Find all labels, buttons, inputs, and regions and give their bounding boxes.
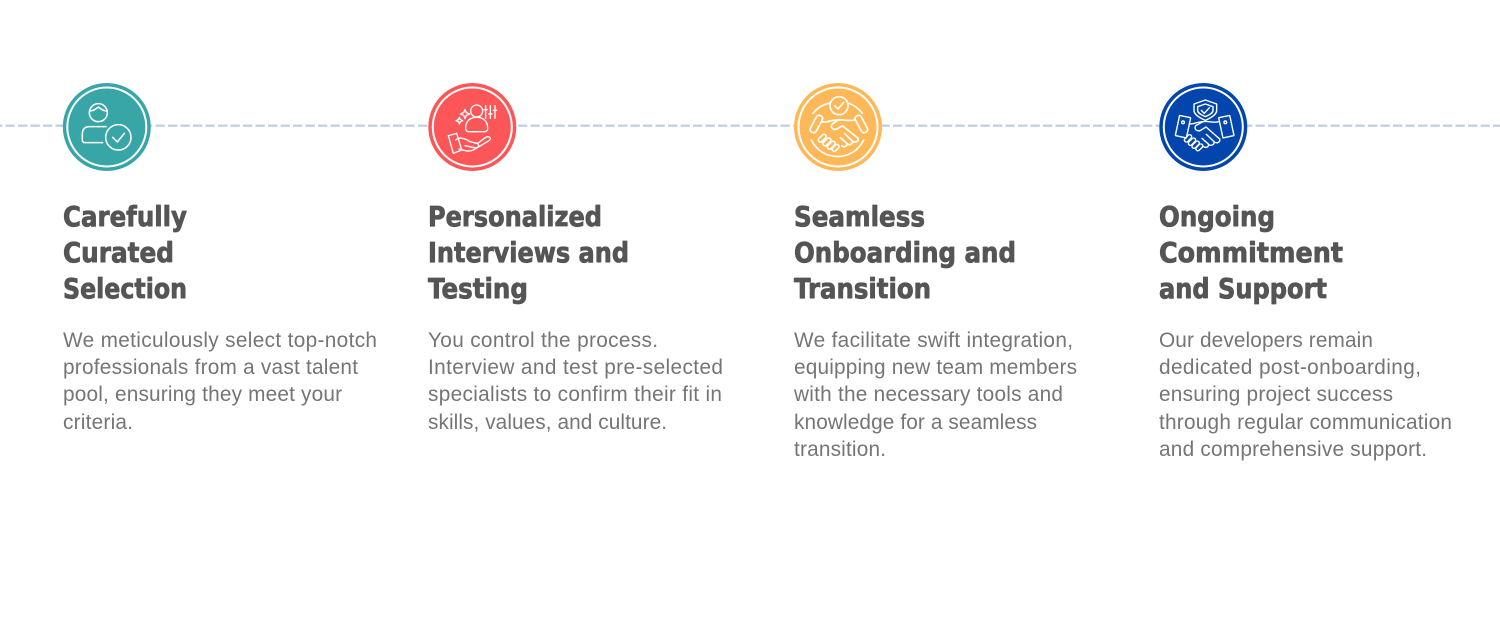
panel: Personalized Interviews and Testing: [428, 83, 723, 434]
icon: person with check mark: [63, 83, 151, 171]
description: and comprehensive support.: [1159, 438, 1427, 461]
description: knowledge for a seamless: [794, 411, 1037, 434]
heading: [1159, 201, 1343, 305]
description: We facilitate swift integration,: [794, 329, 1073, 352]
heading: Ongoing: [1159, 201, 1275, 233]
description: transition.: [794, 438, 886, 461]
description: ensuring project success: [1159, 383, 1393, 406]
description: through regular communication: [1159, 411, 1452, 434]
panel: Carefully Curated Selection: [63, 83, 377, 434]
heading: Carefully: [63, 201, 187, 233]
heading: Onboarding and: [794, 237, 1016, 269]
heading: Transition: [794, 273, 931, 305]
icon: hand holding person with sliders: [428, 83, 516, 171]
heading: Interviews and: [428, 237, 629, 269]
description: specialists to confirm their fit in: [428, 383, 722, 406]
description: dedicated post-onboarding,: [1159, 356, 1421, 379]
icon: handshake with shield: [1159, 83, 1247, 171]
panel: Seamless Onboarding and Transition: [793, 83, 1077, 461]
description: Interview and test pre-selected: [428, 356, 723, 379]
description: We meticulously select top-notch: [63, 329, 377, 352]
heading: and Support: [1159, 273, 1327, 305]
description: You control the process.: [428, 329, 658, 352]
heading: Curated: [63, 237, 174, 269]
panel: Ongoing Commitment and Support: [1159, 83, 1452, 461]
description: skills, values, and culture.: [428, 411, 667, 434]
heading: Seamless: [794, 201, 925, 233]
heading: Personalized: [428, 201, 602, 233]
description: criteria.: [63, 411, 133, 434]
description: pool, ensuring they meet your: [63, 383, 342, 406]
icon: handshake with check badge: [794, 83, 882, 171]
heading: Selection: [63, 273, 187, 305]
heading: [63, 201, 187, 305]
description: [793, 329, 1077, 461]
description: [428, 329, 723, 434]
description: [1159, 329, 1452, 461]
description: equipping new team members: [794, 356, 1077, 379]
description: [63, 329, 377, 434]
heading: [794, 201, 1016, 305]
heading: Testing: [428, 273, 528, 305]
description: Our developers remain: [1159, 329, 1373, 352]
description: with the necessary tools and: [793, 383, 1063, 406]
heading: Commitment: [1159, 237, 1343, 269]
heading: [428, 201, 629, 305]
description: professionals from a vast talent: [63, 356, 358, 379]
